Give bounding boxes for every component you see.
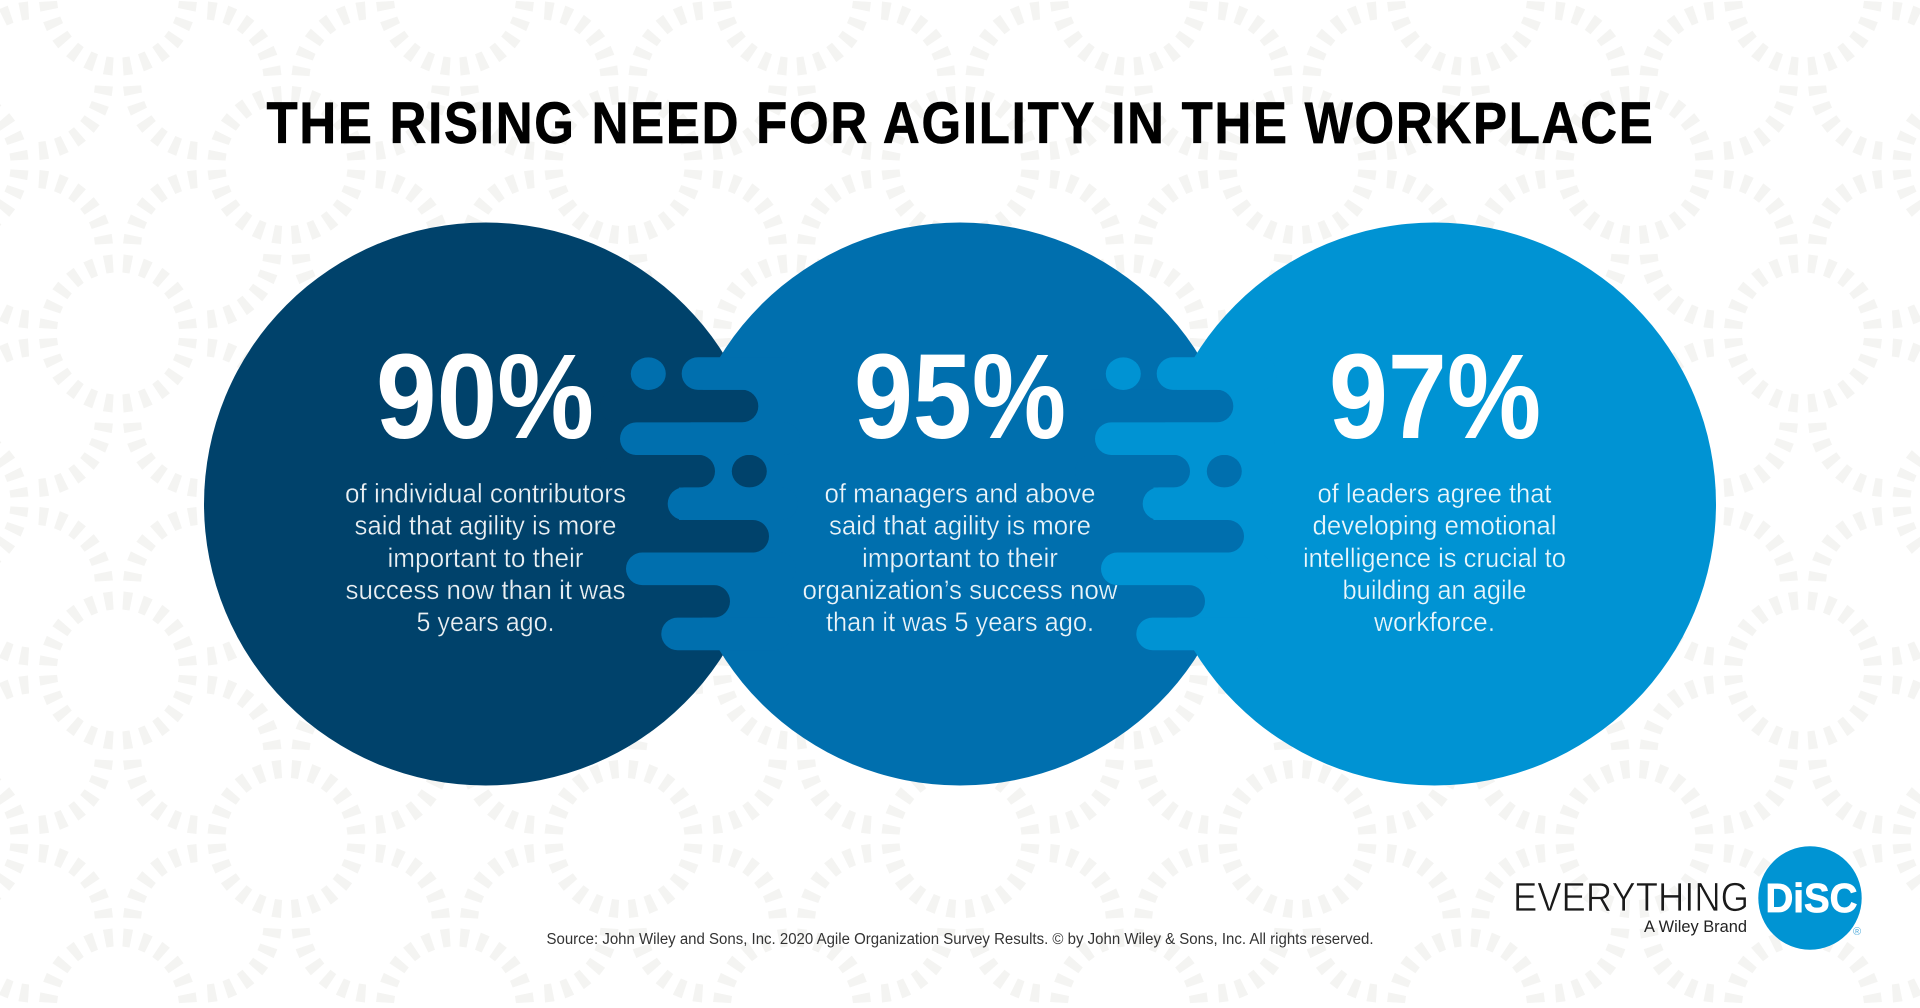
text block: leaders agree (1303, 478, 1566, 637)
text block: individual contributors: 5 years ago. (416, 607, 554, 637)
text block: managers and above: than it was 5 years ago. (826, 607, 1094, 637)
text block: individual contributors: important to their (388, 543, 584, 573)
text block: managers and above: organization’s success now (802, 575, 1118, 605)
panel: circle 3 light blue (1153, 222, 1716, 786)
panel: circle 1 dark blue (204, 222, 767, 786)
logo: Everything DiSC: EVERYTHING (1513, 874, 1749, 920)
text block: leaders agree: intelligence is crucial to (1303, 543, 1566, 573)
text block: leaders agree: workforce. (1373, 607, 1495, 637)
text block: managers and above: said that agility is more (829, 510, 1091, 540)
logo: Everything DiSC: A Wiley Brand (1644, 917, 1747, 936)
stat: 95%: 95% (854, 328, 1066, 464)
panel: circle 2 mid blue (678, 222, 1242, 786)
logo: Everything DiSC (1513, 846, 1862, 950)
interlocking pills between circle 1 and circle 2 (600, 357, 802, 650)
logo: Everything DiSC: ® (1853, 926, 1861, 938)
text block: individual contributors: success now than it was (346, 575, 626, 605)
text block: managers and above (802, 478, 1118, 637)
logo: Everything DiSC: DiSC (1766, 875, 1858, 921)
interlocking pills between circle 2 and circle 3 (1075, 357, 1277, 650)
text block: managers and above: of managers and above (824, 478, 1096, 508)
text block: individual contributors: said that agility is more (354, 510, 616, 540)
stat: 97%: 97% (1329, 328, 1541, 464)
text block: leaders agree: developing emotional (1312, 510, 1556, 540)
text block: leaders agree: building an agile (1342, 575, 1526, 605)
text block: individual contributors: of individual contributors (345, 478, 626, 508)
text block: managers and above: important to their (862, 543, 1058, 573)
stat: 90%: 90% (376, 328, 594, 464)
title: THE RISING NEED FOR AGILITY IN THE WORKPLACE (266, 91, 1654, 156)
text block: individual contributors (345, 478, 626, 637)
text block: leaders agree: of leaders agree that (1318, 478, 1552, 508)
source note: Source: John Wiley and Sons, Inc. 2020 Agile Organization Survey Results. © by John Wiley & Sons, Inc. All rights reserved. (546, 931, 1374, 948)
